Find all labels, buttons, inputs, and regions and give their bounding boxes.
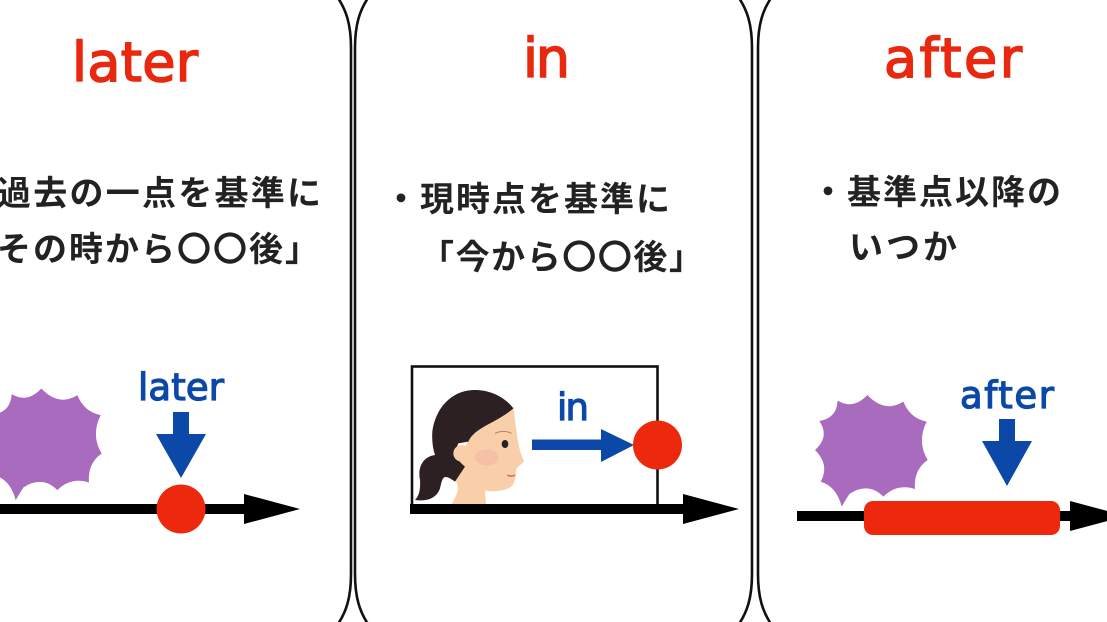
point marker xyxy=(633,420,682,470)
text block: after description: いつか xyxy=(849,229,957,267)
arrow: down to point xyxy=(156,412,206,478)
timeline arrow xyxy=(0,494,300,524)
icon: woman in profile xyxy=(415,390,524,504)
text block: after description: ・ xyxy=(811,174,845,212)
heading: in: in xyxy=(523,27,570,90)
text block: after description: 基準点以降の xyxy=(847,174,1061,212)
panel: in xyxy=(384,27,739,524)
icon: purple burst xyxy=(0,388,102,500)
icon: purple burst xyxy=(815,395,928,507)
point marker xyxy=(156,484,206,534)
frame xyxy=(412,366,658,508)
timeline arrow xyxy=(797,501,1107,531)
panel: after xyxy=(797,27,1107,535)
text block: after description xyxy=(811,174,1061,267)
text block: later description xyxy=(0,175,321,269)
arrow: toward point xyxy=(532,429,634,462)
label: in: in xyxy=(557,386,589,429)
text block: later description: 過去の一点を基準に xyxy=(0,175,321,213)
arrow: down to range xyxy=(982,419,1032,486)
panel border: right divider xyxy=(739,0,771,622)
label: after: after xyxy=(960,374,1055,417)
text block: in description: ・ xyxy=(384,181,418,219)
text block: later description: その時から〇〇後」 xyxy=(0,231,319,269)
timeline arrow xyxy=(410,494,739,524)
panel border: left divider xyxy=(338,0,368,622)
text block: in description xyxy=(384,181,703,277)
range bar xyxy=(864,501,1060,535)
heading: after: after xyxy=(884,27,1023,90)
label: later: later xyxy=(138,366,225,409)
text block: in description: 「今から〇〇後」 xyxy=(420,239,703,277)
panel: later xyxy=(0,31,321,534)
heading: later: later xyxy=(72,31,199,94)
text block: in description: 現時点を基準に xyxy=(420,181,670,219)
